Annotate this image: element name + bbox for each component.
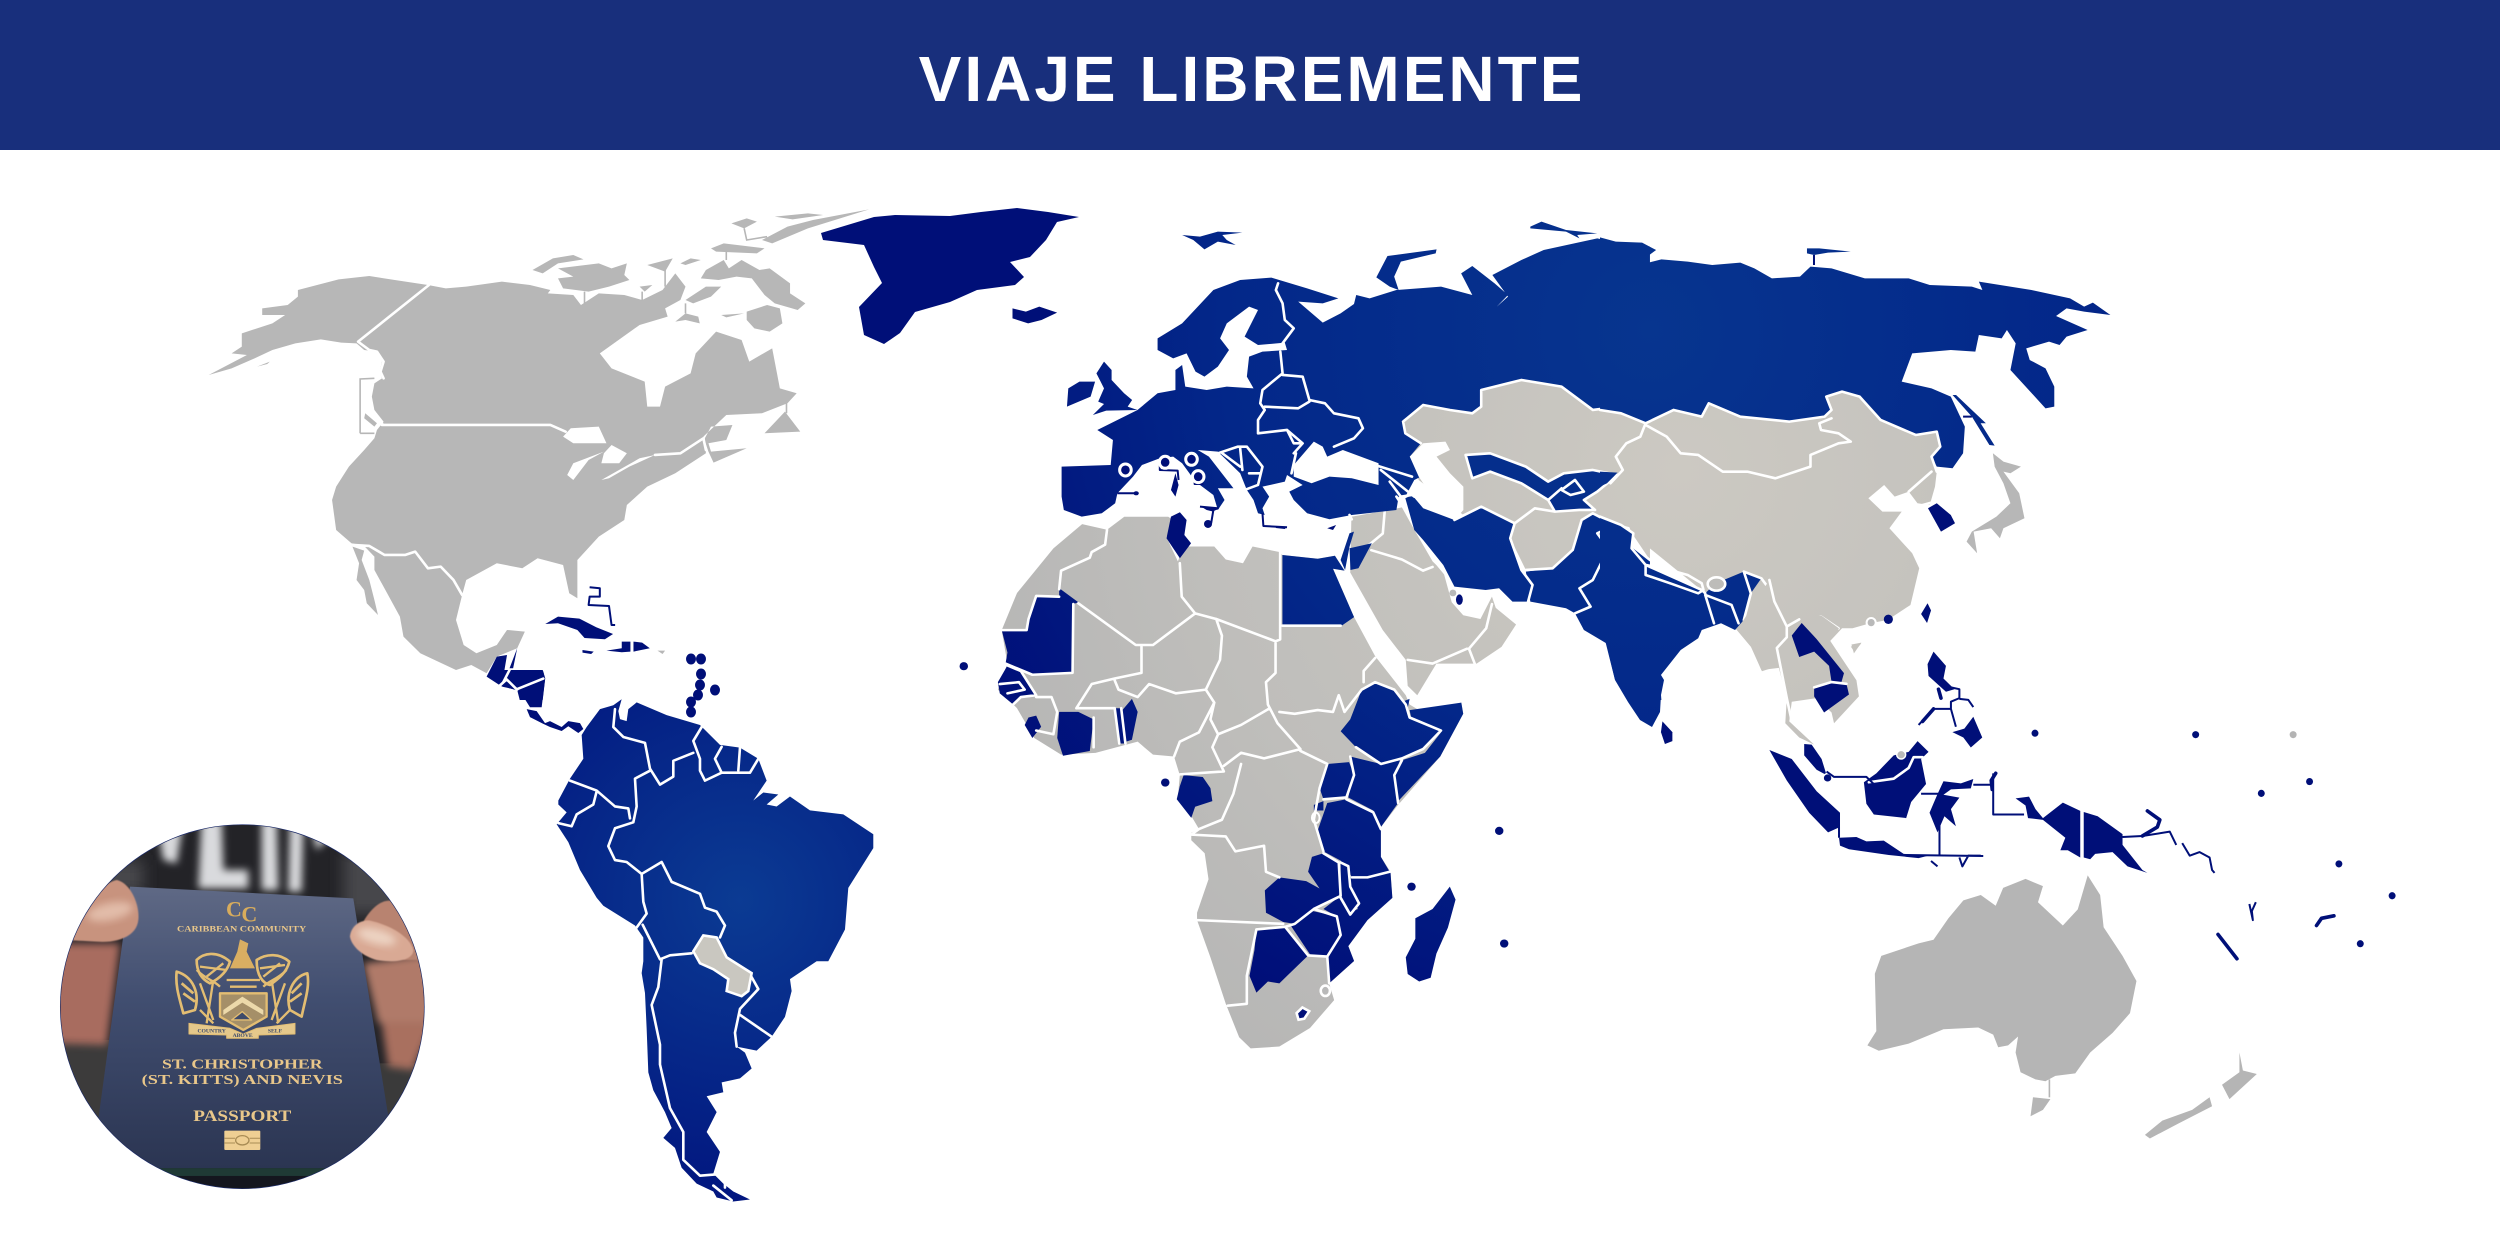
kyrgyzstan edge bbox=[1600, 472, 1618, 487]
iran bbox=[1405, 495, 1533, 602]
china mongolia and mainland asia grey bbox=[1600, 392, 2024, 670]
japan bbox=[1967, 453, 2024, 553]
iceland bbox=[1012, 307, 1057, 323]
greenland bbox=[821, 208, 1079, 344]
passport lettering bbox=[142, 897, 343, 1125]
tunisia bbox=[1167, 512, 1191, 558]
bhutan bbox=[1708, 577, 1725, 591]
passport lettering: C bbox=[241, 901, 257, 926]
title: VIAJE LIBREMENTE bbox=[919, 43, 1585, 115]
southern india tip bbox=[1605, 640, 1664, 727]
taiwan bbox=[1921, 603, 1931, 623]
uzbekistan tajikistan kyrgyzstan bbox=[1466, 453, 1617, 512]
african borders bbox=[1000, 511, 1492, 1006]
passport cover bbox=[92, 887, 397, 1168]
passport lettering: PASSPORT bbox=[193, 1108, 291, 1125]
passport photo: ABOVE bbox=[233, 1033, 253, 1039]
passport lettering: C bbox=[226, 897, 242, 922]
southeast asia and oceania bbox=[1661, 580, 2396, 1138]
eastern russia bbox=[1600, 237, 2110, 468]
coat of arms bbox=[176, 939, 308, 1038]
passport lettering: CARIBBEAN COMMUNITY bbox=[177, 925, 307, 934]
mediterranean islands bbox=[1117, 453, 1336, 530]
caribbean dots bbox=[686, 654, 720, 718]
left finger bbox=[65, 880, 139, 942]
east asia bbox=[1600, 237, 2110, 700]
north america bbox=[209, 209, 869, 700]
pakistan and india west bbox=[1526, 513, 1650, 680]
world map bbox=[209, 208, 2396, 1201]
pacific islands bbox=[2032, 730, 2396, 959]
passport photo: COUNTRY bbox=[197, 1029, 226, 1035]
hong kong macau dots bbox=[1867, 615, 1893, 627]
papua new guinea bbox=[2084, 812, 2147, 873]
african island dots bbox=[960, 594, 1508, 948]
south america bbox=[500, 671, 873, 1201]
passport photo: SELF bbox=[268, 1029, 283, 1035]
palm behind passport bbox=[53, 943, 433, 1070]
central asia and middle east grey bbox=[1403, 380, 1650, 570]
arabian peninsula bbox=[1350, 507, 1516, 695]
central america south bbox=[500, 671, 583, 733]
mainland southeast asia bbox=[1737, 580, 1859, 745]
europe and western russia bbox=[1012, 222, 1650, 680]
photo background bbox=[57, 820, 430, 1193]
new zealand bbox=[2145, 1053, 2257, 1138]
indian ocean island bbox=[1661, 721, 1672, 744]
africa base bbox=[998, 517, 1463, 1048]
passport lettering: (ST. KITTS) AND NEVIS bbox=[142, 1073, 343, 1088]
chip symbol bbox=[224, 1131, 260, 1150]
passport lettering: ST. CHRISTOPHER bbox=[162, 1058, 324, 1073]
right thumb bbox=[349, 900, 418, 962]
blurred shirt letters bbox=[157, 820, 330, 892]
arctic islands bbox=[1182, 222, 1597, 290]
israel and jordan bbox=[1341, 532, 1372, 570]
african blue countries bbox=[998, 555, 1463, 993]
paraguay bbox=[693, 935, 752, 996]
indonesia malaysia bbox=[1769, 741, 2080, 866]
caribbean islands bbox=[545, 587, 665, 654]
east asia borders bbox=[1600, 392, 1940, 643]
passport photo bbox=[53, 820, 433, 1196]
south korea bbox=[1928, 503, 1955, 532]
sakhalin and arctic island bbox=[1807, 248, 1995, 446]
british isles bbox=[1067, 362, 1137, 415]
africa and arabia bbox=[960, 507, 1516, 1048]
white seas bbox=[1294, 442, 1463, 520]
india east and nepal bbox=[1600, 517, 1761, 700]
header banner bbox=[0, 0, 2500, 150]
philippines bbox=[1919, 652, 1982, 748]
central america north bbox=[487, 648, 545, 700]
european borders bbox=[1218, 283, 1650, 613]
australia bbox=[1867, 875, 2136, 1116]
